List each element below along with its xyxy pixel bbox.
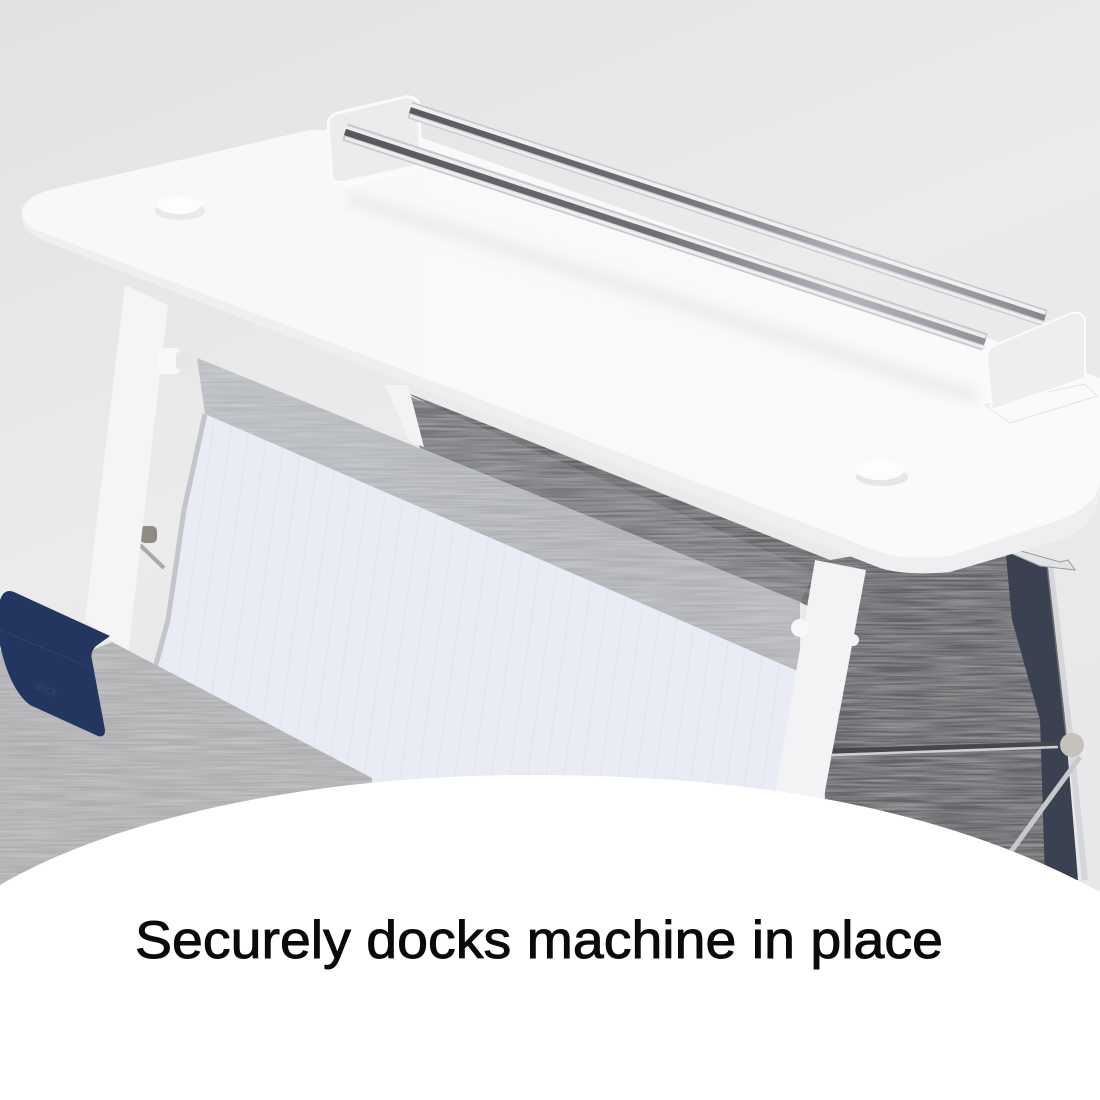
leg pin left xyxy=(158,348,192,374)
caption: Securely docks machine in place xyxy=(135,911,943,970)
right rail bracket xyxy=(985,313,1097,423)
navy leather tag xyxy=(0,591,110,736)
rear fabric sling xyxy=(400,392,1078,890)
table right leg xyxy=(775,560,866,802)
table knob left xyxy=(155,196,205,220)
chrome side brace xyxy=(140,526,1085,880)
front sling panel xyxy=(150,358,800,790)
front fabric sling xyxy=(0,642,372,900)
white caption curve xyxy=(0,775,1100,1100)
left rail bracket xyxy=(328,97,425,187)
table top xyxy=(22,130,1100,573)
leg pin right xyxy=(791,619,859,646)
table knob right xyxy=(856,460,908,486)
chrome rails xyxy=(345,105,1045,348)
table left leg xyxy=(85,285,168,655)
navy leather tag: dock xyxy=(33,680,59,700)
back table leg xyxy=(385,385,424,447)
rail shadow on table xyxy=(345,190,980,405)
